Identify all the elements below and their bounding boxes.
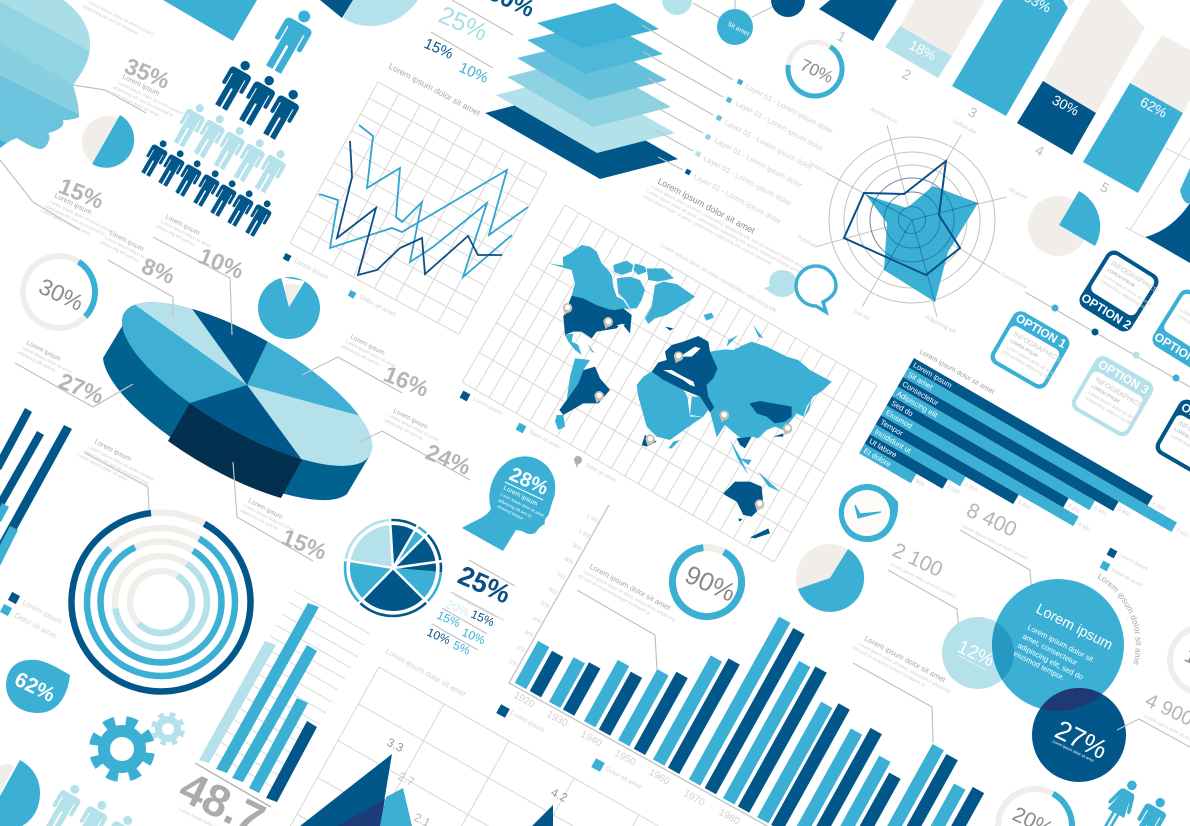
big head silhouette: [0, 0, 90, 149]
horizontal bar chart: 1 300: [963, 482, 978, 494]
column chart legend: [496, 704, 643, 791]
callout: 35 percent: adipiscing elit sed do eiusmod te: [112, 84, 175, 118]
column chart callout right: Lorem ipsum dolor sit amet, consectetur adipiscing: [858, 641, 952, 694]
column chart axes: 1950: [613, 748, 638, 769]
stacked layers diagram: [485, 3, 678, 179]
radar chart: Sed do: [852, 308, 870, 322]
column chart axes: 1960: [647, 767, 672, 788]
overlapping bubbles: 12%: [954, 636, 997, 672]
column chart axes: 1 000: [577, 529, 592, 540]
column chart axes: [507, 505, 1000, 826]
column chart axes: 200: [515, 645, 526, 654]
callout: 15 percent left: [0, 160, 120, 246]
triangle chart grid: [276, 667, 704, 826]
rings legend: Lorem ipsum: [21, 598, 64, 626]
bubbles legend: Lorem ipsum: [1118, 552, 1149, 573]
option card 1: Lorem ipsum dolor sit amet: [1005, 344, 1057, 377]
top stats: 25 15 10 percent: 10%: [456, 59, 491, 87]
horizontal bar chart: Consectetur: [901, 379, 941, 408]
horizontal bar chart: 5 300: [1093, 506, 1107, 518]
top stats: 25 15 10 percent: 25%: [435, 1, 492, 47]
column chart top right: 4: [1033, 142, 1047, 159]
column chart axes: 1940: [579, 729, 604, 750]
layers caption: Lorem ipsum dolor sit amet, consectetur adipiscing elit, sed do eiusmod tempor incididunt: [646, 189, 810, 279]
map legend: Dolor sit amet: [584, 462, 617, 484]
horizontal bar chart: Ut labore: [868, 437, 898, 460]
callouts around 3D pie: adipiscing elit sed do: [384, 417, 424, 441]
stats block: 25 percent: Lorem ipsum dolor sit amet: [454, 592, 506, 622]
stats block: 25 percent: 5%: [451, 638, 473, 658]
option card 3: Lorem ipsum dolor sit amet: [1087, 390, 1138, 422]
layers caption: Lorem ipsum dolor sit amet, consectetur adipiscing elit, sed do eiusmod: [641, 193, 773, 266]
layer labels: Layer 01 - Lorem ipsum dolor: [713, 136, 804, 190]
icon: small gear: [152, 713, 184, 745]
horizontal bar chart: 4 500: [1076, 522, 1091, 534]
radar chart: Tempor: [807, 160, 826, 174]
option card 1: [987, 308, 1075, 393]
column chart callout right: [852, 631, 956, 743]
horizontal bar chart: Lorem ipsum: [912, 360, 954, 390]
horizontal bar chart: Sed do: [890, 398, 915, 418]
head: 28 percent: 28%: [506, 463, 552, 500]
concentric ring chart: [39, 480, 283, 724]
column chart callout left: Lorem ipsum dolor sit amet: [588, 562, 673, 613]
callouts around 3D pie: Lorem ipsum dolor sit amet: [104, 235, 156, 265]
callouts around 3D pie: 10%: [195, 243, 248, 284]
line chart legend: Dolor sit amet: [358, 294, 397, 319]
callout: 35 percent: Lorem ipsum: [121, 74, 161, 98]
callouts around 3D pie: Lorem ipsum dolor sit amet: [21, 345, 73, 375]
layer labels: Layer 01 - Lorem ipsum dolor: [723, 118, 814, 172]
drop: 62 percent: 62%: [11, 668, 59, 707]
top stats: 25 15 10 percent: [421, 0, 538, 87]
callouts around 3D pie: adipiscing elit sed do: [156, 223, 196, 247]
option card 2: Lorem ipsum dolor sit amet: [1103, 273, 1153, 307]
callout: 35 percent: 35%: [121, 53, 174, 94]
option card 3: LOREM IPSUM: [1091, 384, 1121, 404]
overlapping bubbles: amet, consectetur: [1021, 632, 1079, 667]
woman and man icons: [1095, 775, 1173, 826]
segmented pie: [325, 500, 461, 636]
horizontal bar chart: Eiusmod: [884, 408, 914, 430]
callouts around 3D pie: 24%: [422, 439, 475, 480]
overlapping bubbles: adipiscing elit, sed do: [1016, 641, 1085, 682]
option card 3: [1068, 353, 1157, 440]
radar chart: Pulvinar: [796, 234, 817, 249]
option card 1: INFOGRAPHICS: [1012, 331, 1062, 364]
triangle chart peaks: 2.7: [396, 769, 417, 789]
head: 28 percent: adipiscing elit sed do: [498, 497, 534, 519]
callouts around 3D pie: adipiscing elit sed do: [341, 343, 381, 367]
overlapping bubbles: 27%: [1050, 714, 1112, 765]
column chart top right: 30%: [1050, 92, 1082, 119]
column chart top right: 1: [835, 28, 849, 45]
stats block: 25 percent: [425, 560, 515, 658]
column chart axes: 900: [571, 543, 582, 552]
stats block: 25 percent: 15%: [435, 608, 463, 631]
world map: [548, 245, 832, 538]
timeline dots: [1052, 304, 1180, 382]
concentric rings caption: Lorem ipsum: [93, 439, 132, 463]
rings legend: [0, 592, 64, 641]
top stats: 25 15 10 percent: 15%: [421, 35, 456, 63]
horizontal bar chart: Et dolore: [862, 446, 893, 469]
ring: 70 percent: [778, 32, 852, 106]
callouts around 3D pie: Lorem ipsum: [349, 334, 386, 357]
stats block: 25 percent: 10%: [460, 625, 488, 648]
stats block: 25 percent: 10%: [425, 625, 453, 648]
callouts around 3D pie: Lorem ipsum: [164, 214, 201, 237]
radar chart: [796, 106, 1028, 336]
option card 1: LOREM IPSUM: [1009, 338, 1039, 358]
callouts around 3D pie: Lorem ipsum dolor sit amet: [345, 339, 397, 369]
chat bubbles: [764, 266, 836, 312]
horizontal bar chart: 900: [914, 479, 925, 488]
ring: 90 percent: 90%: [681, 559, 740, 608]
option card 1: consectetur adipiscing elit: [1002, 349, 1051, 380]
callouts around 3D pie: Lorem ipsum: [247, 498, 284, 521]
top right area chart fragment: [1125, 138, 1190, 263]
column chart top right: 5: [1098, 179, 1112, 196]
callouts around 3D pie: 16%: [380, 361, 433, 402]
column chart axes: 100: [507, 659, 518, 668]
option card 2: consectetur adipiscing elit: [1100, 278, 1147, 311]
stats block: 25 percent: 20%: [444, 597, 472, 620]
column chart axes: 1920: [512, 690, 537, 711]
head: 28 percent: eiusmod tempor: [497, 503, 525, 521]
radar chart: Sollicitudin: [951, 118, 977, 136]
line chart legend: [283, 253, 397, 319]
layer labels: [642, 25, 835, 226]
option card 5: [1152, 396, 1190, 483]
column chart legend: Dolor sit amet: [604, 766, 643, 791]
callout: 35 percent: Lorem ipsum dolor sit amet: [108, 89, 160, 118]
column chart callout left: elit sed do eiusmod tempor incididunt ut: [577, 573, 652, 616]
column chart top right: 62%: [1138, 94, 1170, 121]
option card 3: INFOGRAPHICS: [1094, 377, 1144, 410]
callout: 15 percent left: Lorem ipsum dolor sit amet: [40, 208, 92, 237]
ring right edge: [1170, 627, 1190, 693]
column chart callout left: [577, 559, 681, 670]
option card 3: OPTION 3: [1096, 357, 1152, 397]
top left text fragment: adipiscing elit sed do eiusmod: [82, 3, 139, 36]
pie: three quarter: [796, 544, 864, 612]
rings legend: Dolor sit amet: [13, 611, 59, 641]
left edge bars: [0, 408, 72, 566]
map legend: Dolor sit amet: [528, 429, 561, 451]
option card 2: OPTION 2: [1079, 291, 1134, 332]
callout: 15 percent left: Lorem ipsum dolor sit amet consect: [49, 199, 117, 235]
head: 28 percent: [462, 456, 555, 551]
radar chart: Architecture: [869, 106, 898, 126]
ring: 30 percent: [9, 242, 109, 342]
callouts around 3D pie: 15%: [278, 524, 331, 565]
icon: large gear: [90, 717, 154, 781]
callout: 35 percent: Lorem ipsum dolor sit amet consect: [117, 80, 185, 116]
horizontal bar chart: Incididunt ut: [873, 427, 913, 456]
column chart axes: 500: [539, 601, 550, 610]
callouts around 3D pie: 27%: [55, 368, 108, 409]
concentric rings caption: [77, 434, 159, 493]
bottom left people: [42, 780, 140, 826]
option card 2: [1076, 247, 1166, 338]
option card 3: consectetur adipiscing elit: [1084, 395, 1133, 426]
column chart bars: [515, 520, 1011, 826]
line chart: [290, 82, 547, 334]
clock drop icon: [839, 484, 898, 542]
bottom left pie: [0, 760, 40, 826]
layer labels: Layer 01 - Lorem ipsum dolor: [702, 154, 793, 208]
top pale pie fragment: [320, 0, 418, 26]
map legend: Lorem ipsum: [472, 396, 503, 417]
overlapping bubbles: Lorem ipsum dolor sit amet: [1052, 739, 1095, 763]
column chart top right: 3: [966, 104, 980, 121]
radar chart: Sit amet: [1007, 186, 1028, 201]
callout: 15 percent left: adipiscing elit sed do eiusmod te: [44, 203, 107, 237]
horizontal bar chart: 3 900: [1116, 507, 1131, 519]
horizontal bars title: Lorem ipsum dolor sit amet: [918, 349, 995, 396]
callouts around 3D pie: adipiscing elit sed do: [17, 349, 57, 373]
callout: 8 400: Lorem ipsum dolor sit amet consect: [962, 523, 1029, 561]
overlapping bubbles: eiusmod tempor.: [1012, 649, 1066, 682]
callout: 35 percent: [73, 53, 188, 127]
concentric rings caption: Lorem ipsum dolor sit amet: [77, 452, 129, 482]
triangle chart title: Lorem ipsum dolor sit amet: [384, 647, 468, 699]
column chart legend: Lorem ipsum: [509, 710, 545, 734]
radar chart: Consectetur: [999, 271, 1028, 291]
people pictogram pyramid: [138, 4, 320, 239]
line chart legend: Lorem ipsum: [293, 258, 330, 281]
network nodes: Sit amet: [726, 21, 751, 38]
callouts around 3D pie: Lorem ipsum dolor sit amet: [243, 503, 295, 533]
layers caption: Lorem ipsum dolor sit amet: [656, 176, 757, 236]
column chart callout right: Lorem ipsum dolor sit amet: [863, 634, 948, 685]
ring: 20 percent: [985, 776, 1085, 826]
callouts around 3D pie: [15, 212, 475, 565]
overlapping bubbles: Lorem ipsum: [1033, 601, 1115, 654]
column chart axes: 400: [531, 616, 542, 625]
small half pie: [82, 115, 134, 168]
column chart top right: 2: [900, 66, 914, 83]
options timeline: [1025, 292, 1190, 387]
ring: 90 percent: [660, 535, 754, 629]
top left text fragment: Lorem ipsum dolor sit amet consect: [88, 0, 155, 37]
notched pie: [258, 277, 320, 339]
callout: 8 400: 8 400: [963, 499, 1020, 542]
head: 28 percent: Lorem ipsum dolor sit amet: [500, 491, 546, 518]
map caption: Lorem ipsum dolor sit amet, consectetur adipiscing elit.: [659, 243, 778, 315]
triangle chart peaks: [300, 735, 570, 826]
radar chart: Adipiscing elit: [924, 314, 957, 336]
callouts around 3D pie: Lorem ipsum dolor sit amet: [388, 413, 440, 443]
horizontal bar chart: Adipiscing elit: [895, 389, 940, 420]
horizontal bar chart: 1 200: [946, 484, 960, 496]
column chart top right: 18%: [907, 37, 939, 64]
top partial blue bar: [163, 0, 257, 41]
column chart callout right: elit sed do eiusmod tempor incididunt ut: [852, 645, 927, 688]
column chart top right: [819, 0, 1190, 196]
map legend: [460, 391, 617, 484]
horizontal bar chart: Tempor: [879, 418, 905, 438]
callout: 15 percent left: Lorem ipsum: [53, 193, 93, 217]
line chart title: Lorem ipsum dolor sit amet: [387, 61, 483, 118]
callout: 15 percent left: 15%: [55, 173, 108, 214]
callouts around 3D pie: Lorem ipsum: [108, 230, 145, 253]
stats block: 25 percent: 25%: [454, 560, 515, 609]
triangle chart peaks: 4.2: [549, 785, 570, 805]
option card 4: [1149, 286, 1190, 377]
callouts around 3D pie: adipiscing elit sed do: [100, 239, 140, 263]
callouts around 3D pie: 8%: [138, 253, 179, 289]
column chart axes: 600: [547, 587, 558, 596]
column chart axes: 700: [555, 572, 566, 581]
layer labels: Layer 01 - Lorem ipsum dolor: [734, 99, 825, 153]
horizontal bar chart: 4 200: [1066, 503, 1081, 515]
callouts around 3D pie: adipiscing elit sed do: [239, 507, 279, 531]
ring: 30 percent: 30%: [35, 273, 88, 316]
column chart axes: 300: [523, 630, 534, 639]
concentric rings caption: Lorem ipsum dolor sit amet consect: [88, 444, 155, 482]
column chart axes: 1970: [682, 788, 707, 809]
callout: 4 900: [1117, 690, 1190, 751]
horizontal bar chart: [859, 358, 1190, 617]
column chart callout left: Lorem ipsum dolor sit amet, consectetur adipiscing: [583, 569, 677, 622]
3D pie chart: [103, 302, 372, 500]
layers caption: Lorem ipsum dolor sit amet, consectetur adipiscing elit, sed do eiusmod tempor incididunt: [651, 184, 814, 274]
triangle chart peaks: 3.3: [385, 735, 406, 755]
column chart axes: 1 400: [585, 514, 600, 525]
column chart axes: 1930: [545, 709, 570, 730]
option card 1: OPTION 1: [1013, 311, 1069, 351]
map pins: [563, 303, 792, 511]
network nodes: [662, 0, 805, 45]
drop: 62 percent: [6, 660, 70, 713]
stats block: 25 percent: 15%: [469, 607, 497, 630]
option card 2: LOREM IPSUM: [1106, 267, 1136, 288]
callouts around 3D pie: Lorem ipsum: [392, 408, 429, 431]
concentric rings caption: adipiscing elit sed do eiusmod temp: [82, 448, 150, 486]
horizontal bar chart: 6 200: [1151, 501, 1166, 513]
column chart axes: 800: [563, 557, 574, 566]
horizontal bar chart: Sit amet: [906, 370, 935, 392]
curved caption: Lorem ipsum dolor sit amet.: [1098, 573, 1142, 664]
world map grid: [462, 205, 877, 562]
callout: 8 400: [960, 499, 1032, 595]
overlapping bubbles: Lorem ipsum dolor sit: [1026, 623, 1096, 664]
callouts around 3D pie: Lorem ipsum dolor sit amet: [160, 219, 212, 249]
vertical bars chart: [195, 591, 370, 807]
ring: 70 percent: 70%: [797, 55, 836, 87]
layer labels: Layer 01 - Lorem ipsum dolor: [692, 172, 783, 226]
option card 2: INFOGRAPHICS: [1110, 260, 1159, 295]
overlapping bubbles: [942, 579, 1126, 782]
pie: quarter: [1028, 191, 1100, 256]
callout: 2 100: [888, 539, 959, 632]
callout: 2 100: 2 100: [889, 539, 946, 582]
callout: 2 100: Lorem ipsum dolor sit amet consect: [890, 561, 957, 599]
bubbles legend: [1100, 548, 1149, 589]
bubbles legend: Dolor sit amet: [1110, 567, 1143, 589]
callouts around 3D pie: Lorem ipsum: [25, 340, 62, 363]
horizontal bar chart: 7 100: [1175, 527, 1189, 540]
horizontal bar chart: 3 400: [1016, 500, 1031, 512]
head: 28 percent: Lorem ipsum: [502, 485, 539, 508]
layer labels: Layer 01 - Lorem ipsum dolor: [744, 82, 835, 136]
